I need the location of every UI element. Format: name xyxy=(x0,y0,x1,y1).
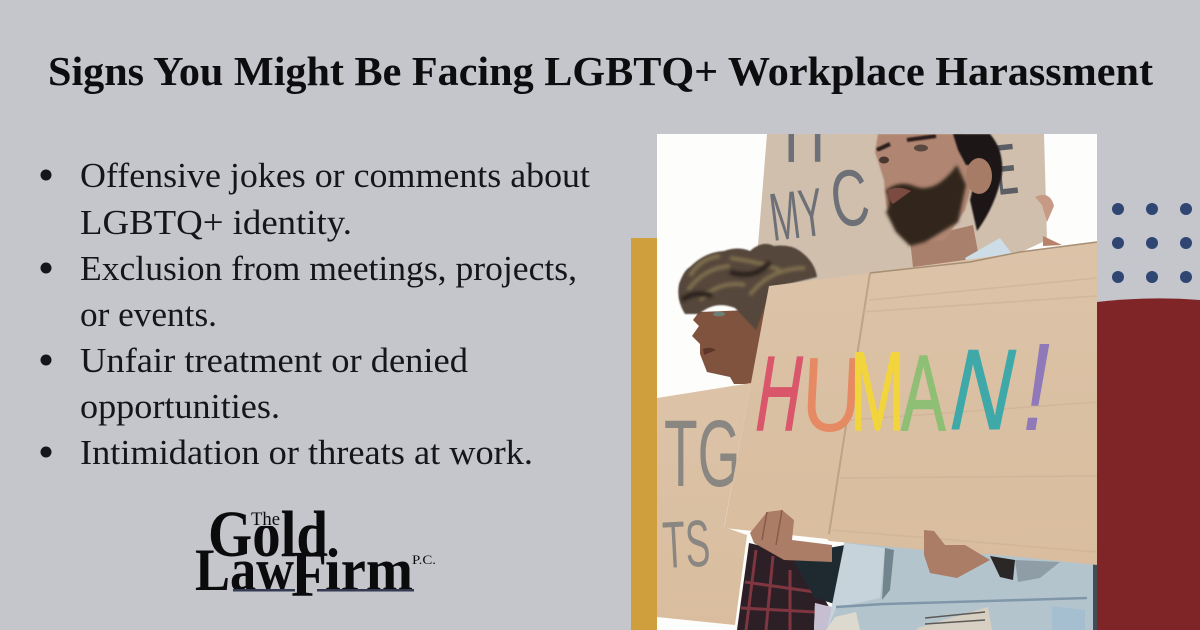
main sign: HUMAN! xyxy=(724,242,1097,565)
back sign: it's my choice: C xyxy=(825,152,875,246)
handwritten word in rainbow colours: U xyxy=(799,336,865,454)
bullet: intimidation: Intimidation or threats at work. xyxy=(80,433,533,472)
bullet: unfair treatment xyxy=(40,341,469,426)
handwritten word in rainbow colours: A xyxy=(901,334,946,454)
handwritten word in rainbow colours: ! xyxy=(1013,318,1062,457)
bullet: unfair treatment: opportunities. xyxy=(80,387,280,426)
title: Signs You Might Be Facing LGBTQ+ Workplace Harassment xyxy=(48,48,1153,94)
left sign: LGBTQ rights xyxy=(657,383,751,625)
logo: The Gold Law Firm P.C. xyxy=(195,498,436,611)
logo: The Gold Law Firm P.C.: Gold xyxy=(208,498,328,571)
hands gripping the sign xyxy=(750,510,990,578)
logo: The Gold Law Firm P.C.: P.C. xyxy=(412,552,436,567)
left sign: LGBTQ rights: TS xyxy=(661,508,712,583)
photo: protesters holding cardboard signs xyxy=(657,103,1097,630)
logo: The Gold Law Firm P.C.: Law xyxy=(195,537,295,603)
back sign: it's my choice: IT xyxy=(783,103,836,177)
handwritten word in rainbow colours: M xyxy=(850,329,905,454)
bullet: exclusion: Exclusion from meetings, projects, xyxy=(80,249,577,288)
bullet: offensive jokes xyxy=(40,156,590,242)
handwritten word in rainbow colours: H xyxy=(748,334,812,453)
bullet: unfair treatment: Unfair treatment or denied xyxy=(80,341,469,380)
handwritten word in rainbow colours: N xyxy=(940,325,1028,454)
lower clothing: plaid shirt and denim jacket xyxy=(737,540,1097,630)
logo: The Gold Law Firm P.C.: irm xyxy=(325,537,413,603)
bullet list xyxy=(40,156,590,472)
red accent block xyxy=(1097,298,1200,630)
man: head and neck xyxy=(874,134,1012,268)
logo: The Gold Law Firm P.C.: The xyxy=(251,509,280,530)
handwritten word in rainbow colours xyxy=(756,344,1050,432)
back sign: it's my choice: E xyxy=(991,127,1021,210)
left sign: LGBTQ rights: TG xyxy=(664,402,741,507)
bullet: exclusion xyxy=(40,249,577,334)
back sign: it's my choice xyxy=(758,134,1062,284)
bullet: exclusion: or events. xyxy=(80,295,217,334)
bullet: offensive jokes: Offensive jokes or comments about xyxy=(80,156,590,195)
logo: The Gold Law Firm P.C.: F xyxy=(291,538,327,611)
woman: curly hair and face xyxy=(678,244,817,384)
navy dot grid xyxy=(1112,203,1192,283)
back sign: it's my choice: MY xyxy=(766,175,827,256)
bullet: offensive jokes: LGBTQ+ identity. xyxy=(80,203,352,242)
gold accent bar xyxy=(631,238,657,630)
